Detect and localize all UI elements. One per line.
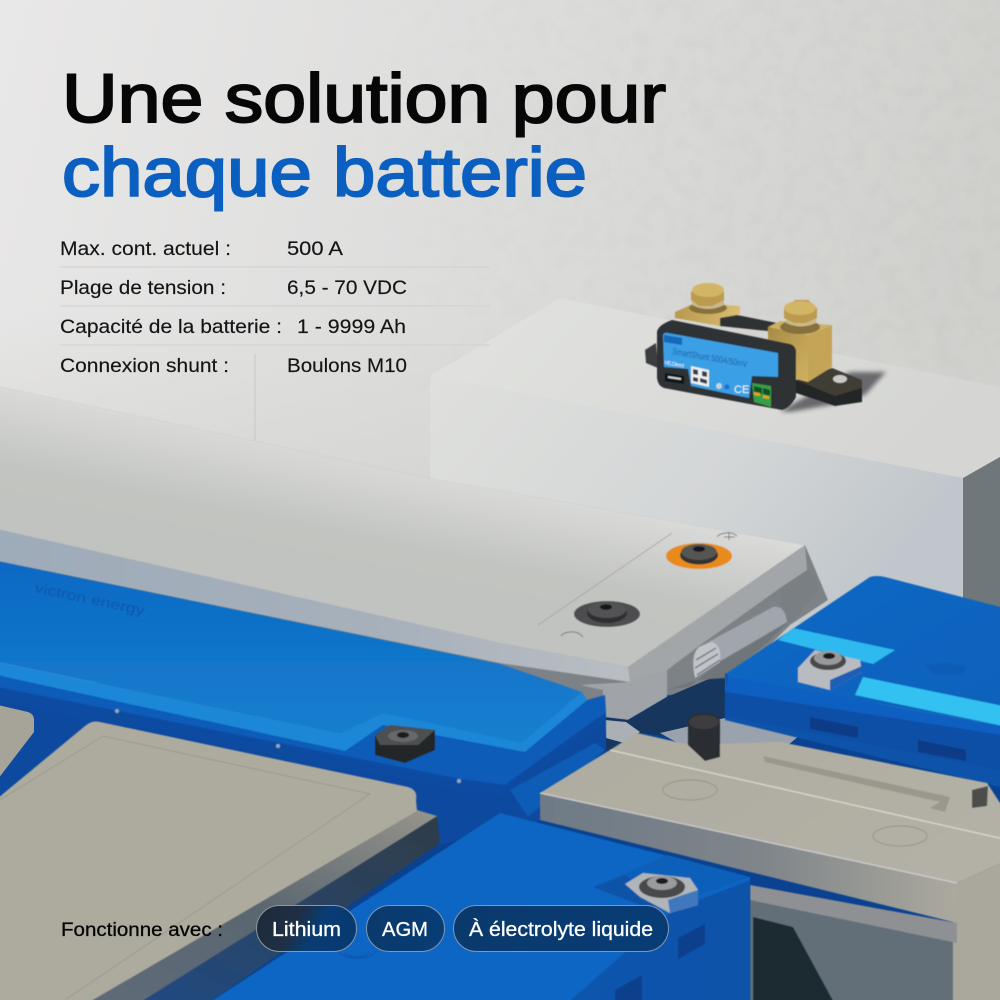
compatibility label: Fonctionne avec : [61, 919, 223, 941]
row: max current: 500 A [287, 238, 343, 260]
brass block right [768, 321, 832, 382]
gray battery [0, 385, 828, 720]
qr code [691, 366, 709, 387]
flange top [0, 673, 606, 785]
pill: liquid electrolyte [454, 906, 668, 952]
blue label [663, 333, 778, 398]
hex terminal [375, 725, 435, 763]
smartshunt device [645, 283, 886, 412]
brass block left [675, 303, 740, 326]
positive terminal [666, 543, 732, 569]
beige battery lower left [0, 722, 440, 1000]
row: voltage range [60, 277, 407, 299]
side grip block [780, 570, 822, 625]
black housing [657, 320, 796, 410]
right mounting foot [796, 368, 862, 406]
row: max current: Max. cont. actuel : [60, 238, 231, 260]
hex nut [625, 873, 698, 913]
led dots [716, 383, 722, 389]
row: max current [60, 238, 343, 260]
row: voltage range: 6,5 - 70 VDC [287, 277, 407, 299]
usb port [665, 373, 684, 384]
middle black strip [720, 315, 777, 331]
pill: AGM [366, 906, 444, 952]
row: voltage range: Plage de tension : [60, 277, 226, 299]
black post [688, 713, 720, 761]
wall background [0, 0, 1000, 478]
title: chaque batterie [62, 134, 587, 211]
title [62, 60, 666, 211]
corner tab [510, 743, 605, 817]
row: battery capacity [60, 316, 406, 338]
logo text on lid: victron energy [33, 579, 146, 618]
smartshunt device: VE.Direct [664, 360, 685, 370]
polarity marks [561, 532, 737, 637]
pill: liquid electrolyte: À électrolyte liquide [469, 918, 653, 941]
front lip [580, 670, 667, 720]
beige battery right [540, 713, 1000, 1000]
lid lip [0, 661, 587, 752]
beige battery upper left [0, 705, 34, 779]
flange side [0, 686, 606, 795]
pill: Lithium [256, 906, 356, 952]
frayed cable [667, 607, 787, 690]
green connector [752, 383, 771, 407]
row: shunt connection: Boulons M10 [287, 355, 407, 377]
ce mark: CE [734, 384, 749, 396]
dark underlay between batteries [0, 670, 1000, 1000]
pill: Lithium: Lithium [272, 919, 341, 941]
title: Une solution pour [62, 60, 666, 137]
blue battery lower [201, 813, 750, 1000]
shadow [780, 372, 886, 412]
navy base under gray battery [603, 672, 800, 752]
bolt left [689, 283, 727, 314]
specifications table [60, 238, 490, 377]
blue battery left [0, 560, 606, 845]
row: shunt connection: Connexion shunt : [60, 355, 229, 377]
hex nut [798, 650, 862, 690]
side slots [810, 717, 966, 761]
row: shunt connection [60, 355, 407, 377]
bolt right [780, 300, 820, 334]
logo emboss [338, 950, 376, 958]
pill: AGM: AGM [382, 919, 428, 941]
body [0, 688, 606, 845]
negative terminal [574, 601, 640, 627]
stone pedestal [430, 298, 1000, 640]
label text: SmartShunt 500A/50mV [672, 346, 748, 369]
lid [0, 560, 582, 745]
cyan stripes [778, 628, 1000, 727]
row: battery capacity: 1 - 9999 Ah [297, 316, 406, 338]
left mounting foot [645, 343, 658, 368]
blue battery right [725, 576, 1000, 789]
row: battery capacity: Capacité de la batterie : [60, 316, 282, 338]
